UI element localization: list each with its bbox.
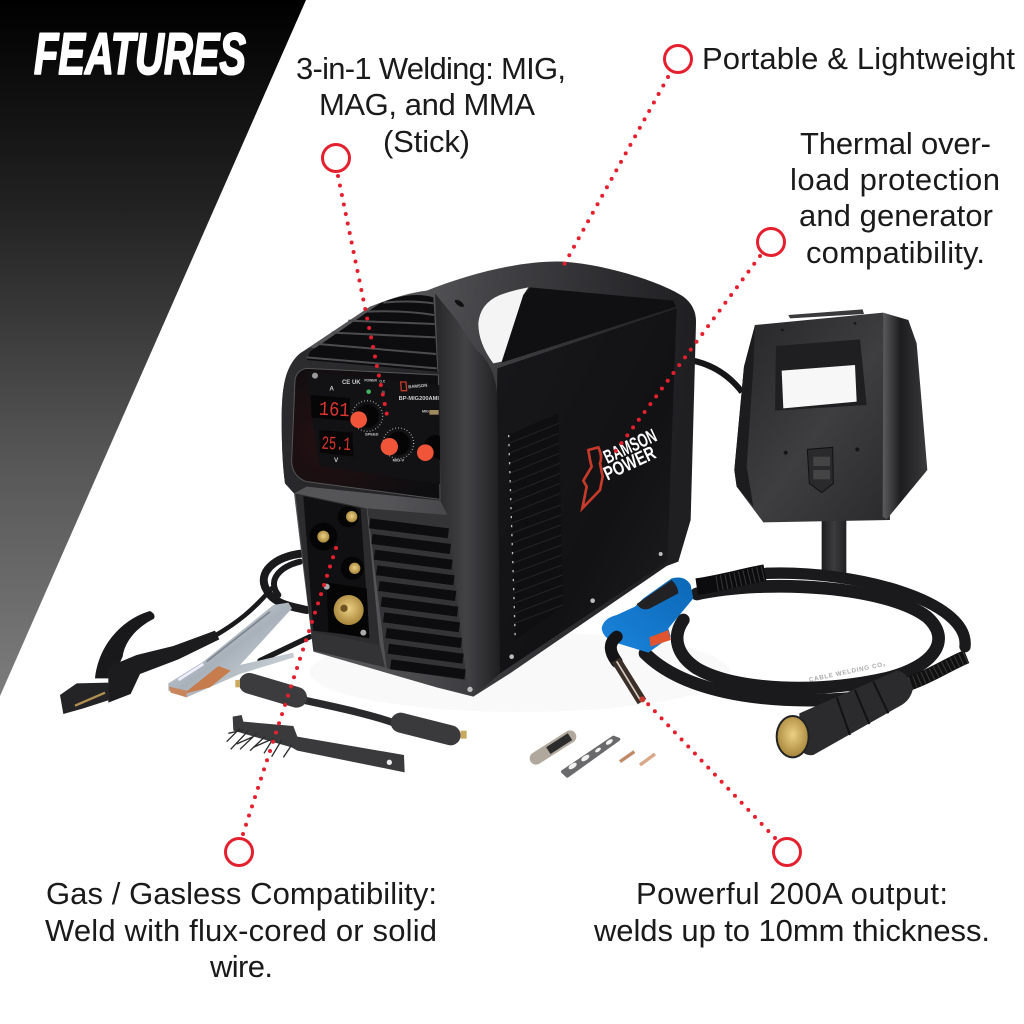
callout text bbox=[790, 126, 1000, 270]
brand logo on side: BAMSON bbox=[601, 426, 660, 469]
wire speed knob: SPEED bbox=[365, 431, 379, 436]
base bbox=[312, 632, 385, 667]
front corner moulding bbox=[435, 293, 500, 697]
strain relief near connector bbox=[910, 657, 967, 683]
green power LED bbox=[366, 389, 371, 394]
control panel: MIG bbox=[422, 410, 429, 414]
helmet shell bbox=[734, 313, 890, 522]
voltage knob: MIG-V bbox=[393, 457, 405, 462]
marker line bbox=[243, 542, 338, 834]
marker line bbox=[560, 77, 668, 272]
control panel: POWER bbox=[364, 378, 378, 382]
callout text: Powerful 200A output: bbox=[636, 876, 948, 911]
cable marking: CABLE WELDING CO₂ bbox=[808, 661, 887, 684]
torch handle bbox=[602, 577, 693, 653]
helmet stand pole bbox=[822, 520, 846, 573]
control panel bbox=[307, 372, 440, 484]
callout text: Thermal over- bbox=[800, 126, 991, 161]
welder body silhouette bbox=[282, 262, 696, 697]
marker circle bbox=[322, 144, 350, 172]
handle opening bbox=[478, 287, 528, 363]
amp display: 161 bbox=[318, 399, 350, 423]
cable coil behind the welder bbox=[213, 553, 310, 661]
lower socket bbox=[341, 557, 364, 580]
electrode holder, earth clamp, cable and brush accessories bbox=[60, 553, 467, 772]
lower front vent slats bbox=[370, 523, 465, 674]
control panel: CE UK bbox=[342, 380, 361, 386]
left socket bbox=[309, 523, 337, 551]
lower front vent surround bbox=[367, 508, 467, 681]
callout text bbox=[593, 876, 990, 948]
marker line bbox=[647, 703, 775, 838]
callout: portable and lightweight bbox=[560, 41, 1015, 272]
callout text: 3-in-1 Welding: MIG, bbox=[296, 51, 566, 86]
control panel: BP-MIG200AMI bbox=[399, 396, 439, 402]
welder machine bbox=[282, 262, 696, 697]
viewing window bbox=[782, 365, 857, 408]
volt display: 25.1 bbox=[321, 433, 351, 456]
torch nozzle bbox=[616, 660, 642, 702]
welding helmet on stand bbox=[734, 309, 927, 573]
callout text: MAG, and MMA bbox=[319, 87, 535, 122]
callout: gas and gasless compatibility bbox=[45, 542, 437, 984]
brand logo on side: POWER bbox=[601, 443, 659, 485]
brand logo on side bbox=[582, 426, 660, 508]
callout text: load protection bbox=[790, 162, 1000, 197]
marker line bbox=[612, 256, 760, 456]
marker line bbox=[338, 176, 388, 420]
body screws bbox=[467, 552, 663, 692]
euro connector brass face bbox=[777, 716, 809, 757]
control panel: A bbox=[329, 386, 334, 393]
callout text bbox=[296, 51, 566, 159]
side panel bbox=[495, 308, 677, 673]
callout: 3-in-1 welding bbox=[296, 51, 566, 420]
control panel: V bbox=[334, 457, 339, 464]
callout text: Weld with flux-cored or solid bbox=[45, 913, 437, 948]
callout text: Gas / Gasless Compatibility: bbox=[46, 876, 437, 911]
hose coils bbox=[645, 573, 965, 700]
upper front vent bbox=[307, 295, 437, 372]
callout text: welds up to 10mm thickness. bbox=[593, 913, 990, 948]
floor shadow bbox=[310, 632, 730, 712]
callout text: Portable & Lightweight bbox=[702, 41, 1015, 76]
helmet top strip bbox=[788, 309, 864, 318]
cable from helmet to the welder bbox=[690, 360, 742, 392]
callout text: (Stick) bbox=[383, 124, 470, 159]
marker circle bbox=[774, 838, 800, 866]
extension cable with dinse plugs bbox=[235, 680, 467, 739]
helmet left facet bbox=[734, 325, 755, 507]
upper socket bbox=[338, 506, 359, 527]
top surface of the case bbox=[502, 287, 676, 363]
earth clamp bbox=[168, 603, 294, 697]
helmet latch bbox=[807, 447, 833, 493]
spare contact tips and nozzle bbox=[536, 737, 655, 776]
control panel: O.C bbox=[379, 380, 386, 384]
helmet right facet bbox=[883, 313, 927, 519]
callout: thermal overload protection bbox=[612, 126, 1000, 456]
side vent bbox=[508, 413, 563, 640]
connector panel bbox=[295, 493, 385, 667]
handle screw slot bbox=[454, 298, 465, 308]
callout text: compatibility. bbox=[806, 235, 985, 270]
contact tip two bbox=[640, 754, 655, 765]
torch neck bbox=[611, 637, 617, 662]
electrode holder bbox=[60, 611, 219, 714]
control panel recess bbox=[292, 368, 440, 499]
MIG torch and hose bbox=[602, 573, 967, 757]
control panel: BAMSON bbox=[408, 383, 428, 389]
euro connector body bbox=[799, 671, 913, 755]
strain relief near torch bbox=[697, 573, 765, 587]
euro connector ribs bbox=[837, 682, 888, 735]
anti-spatter tool bbox=[563, 737, 619, 776]
title: FEATURES bbox=[34, 22, 246, 87]
helmet screws bbox=[781, 322, 859, 455]
callout text bbox=[45, 876, 437, 984]
spare nozzle bbox=[536, 737, 570, 758]
torch handle grip bbox=[637, 580, 678, 609]
callout: powerful 200A output bbox=[593, 703, 990, 948]
euro torch socket bbox=[324, 583, 369, 638]
marker circle bbox=[758, 228, 784, 256]
header background wedge bbox=[0, 0, 306, 696]
marker circle bbox=[664, 46, 692, 72]
callout text: and generator bbox=[799, 198, 993, 233]
wire brush and chipping hammer bbox=[227, 715, 405, 772]
torch trigger bbox=[649, 630, 671, 647]
front bezel bbox=[282, 347, 441, 501]
contact tip one bbox=[620, 752, 634, 762]
third knob bbox=[417, 435, 440, 461]
callout text: wire. bbox=[209, 949, 273, 984]
viewing window frame bbox=[775, 339, 867, 411]
nozzle tip bbox=[639, 696, 645, 702]
marker circle bbox=[226, 838, 252, 866]
